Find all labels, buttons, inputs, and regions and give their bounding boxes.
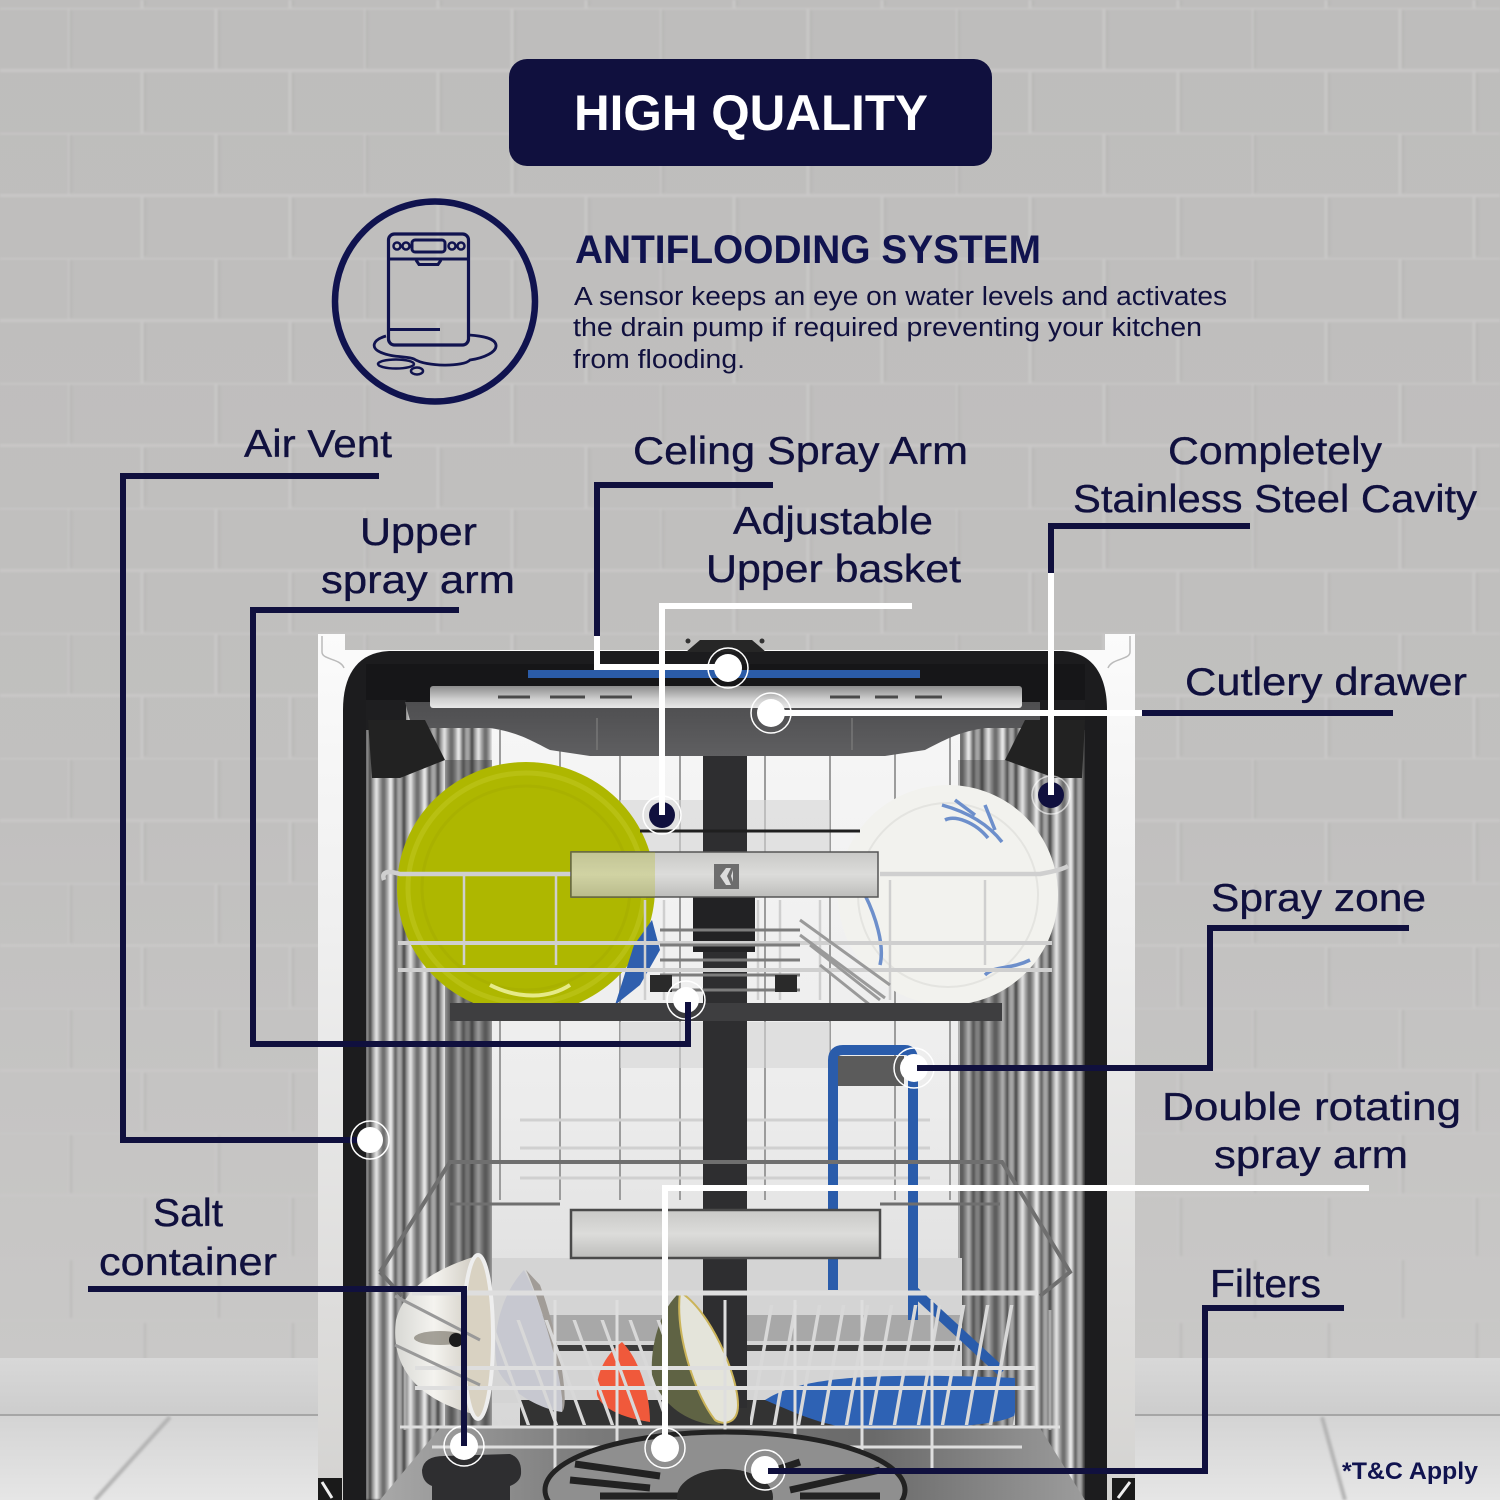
- cabinet body: [318, 634, 1135, 1500]
- filter drum: [545, 1432, 905, 1500]
- callout: double rotating spray arm: spray arm: [1214, 1134, 1408, 1177]
- callout: filters: [745, 1263, 1344, 1490]
- callout: air vent: [123, 423, 392, 1159]
- callout: adjustable upper basket: Adjustable: [733, 500, 933, 543]
- feature heading: ANTIFLOODING SYSTEM: [575, 228, 1041, 272]
- callout: ceiling spray arm: Celing Spray Arm: [633, 430, 968, 473]
- spray zone display: [838, 1056, 904, 1086]
- footnote: *T&C Apply: [1342, 1458, 1479, 1485]
- callout: spray zone: [894, 877, 1426, 1088]
- white decorated plate: [838, 785, 1058, 1005]
- callout: salt container: [88, 1192, 484, 1466]
- callout: upper spray arm: spray arm: [321, 559, 515, 602]
- blue lower spray arm: [765, 1376, 1015, 1429]
- dishwasher photo illustration: [318, 634, 1135, 1500]
- orange bowl: [597, 1342, 650, 1422]
- callout: stainless steel cavity: [1032, 430, 1478, 814]
- inner cavity: [366, 666, 1085, 1500]
- central dark block behind upper basket: [693, 897, 755, 952]
- lower basket tines: [495, 1305, 1015, 1425]
- upper housing: [368, 686, 1085, 778]
- top ceiling spray arm: [366, 638, 1085, 730]
- feature description: [573, 283, 1227, 374]
- lower floor: [380, 1428, 1085, 1500]
- upper basket clips: [650, 975, 797, 992]
- lower basket handle: [571, 1210, 880, 1258]
- callout: cutlery drawer: Cutlery drawer: [1185, 661, 1467, 704]
- salt container cap: [422, 1454, 521, 1500]
- callout: ceiling spray arm: [597, 430, 968, 688]
- callout: adjustable upper basket: Upper basket: [706, 548, 961, 591]
- lower basket rails: [395, 1293, 1060, 1470]
- grey plate edge: [526, 1270, 565, 1412]
- upper basket handle with logo: [571, 852, 878, 897]
- callout: double rotating spray arm: Double rotating: [1162, 1086, 1461, 1129]
- olive and cream plate: [652, 1292, 738, 1425]
- callout: double rotating spray arm: [645, 1086, 1461, 1468]
- upper basket wires: [383, 831, 1068, 1005]
- callout: salt container: Salt: [153, 1192, 223, 1235]
- grey plates: [495, 1270, 562, 1412]
- callout: upper spray arm: Upper: [360, 511, 477, 554]
- central column: [703, 756, 747, 1500]
- callout: air vent: Air Vent: [244, 423, 392, 466]
- feature description: the drain pump if required preventing your kitchen: [573, 314, 1202, 342]
- callout: stainless steel cavity: Completely: [1168, 430, 1383, 473]
- door frame: [343, 651, 1107, 1500]
- pot: [395, 1255, 493, 1419]
- callout: salt container: container: [99, 1241, 277, 1284]
- title badge: HIGH QUALITY: [574, 85, 928, 141]
- green plate: [397, 762, 660, 1014]
- feature description: A sensor keeps an eye on water levels and activates: [574, 283, 1227, 311]
- upper rack shelf: [450, 1003, 1002, 1021]
- title badge: [509, 59, 992, 166]
- backdrop behind lower rack: [492, 1258, 962, 1428]
- blue spray arm tower: [833, 1050, 1002, 1372]
- callout: spray zone: Spray zone: [1211, 877, 1426, 920]
- callout: stainless steel cavity: Stainless Steel Cavity: [1073, 478, 1478, 521]
- feature description: from flooding.: [573, 346, 745, 374]
- callout: adjustable upper basket: [643, 500, 961, 834]
- callout: cutlery drawer: [751, 661, 1467, 733]
- lower basket frame: [380, 1162, 1070, 1430]
- callout: upper spray arm: [253, 511, 705, 1044]
- icon: dishwasher with water puddle: [335, 202, 535, 402]
- callout: filters: Filters: [1210, 1263, 1321, 1306]
- right-side and left-side door columns: [345, 800, 1106, 1500]
